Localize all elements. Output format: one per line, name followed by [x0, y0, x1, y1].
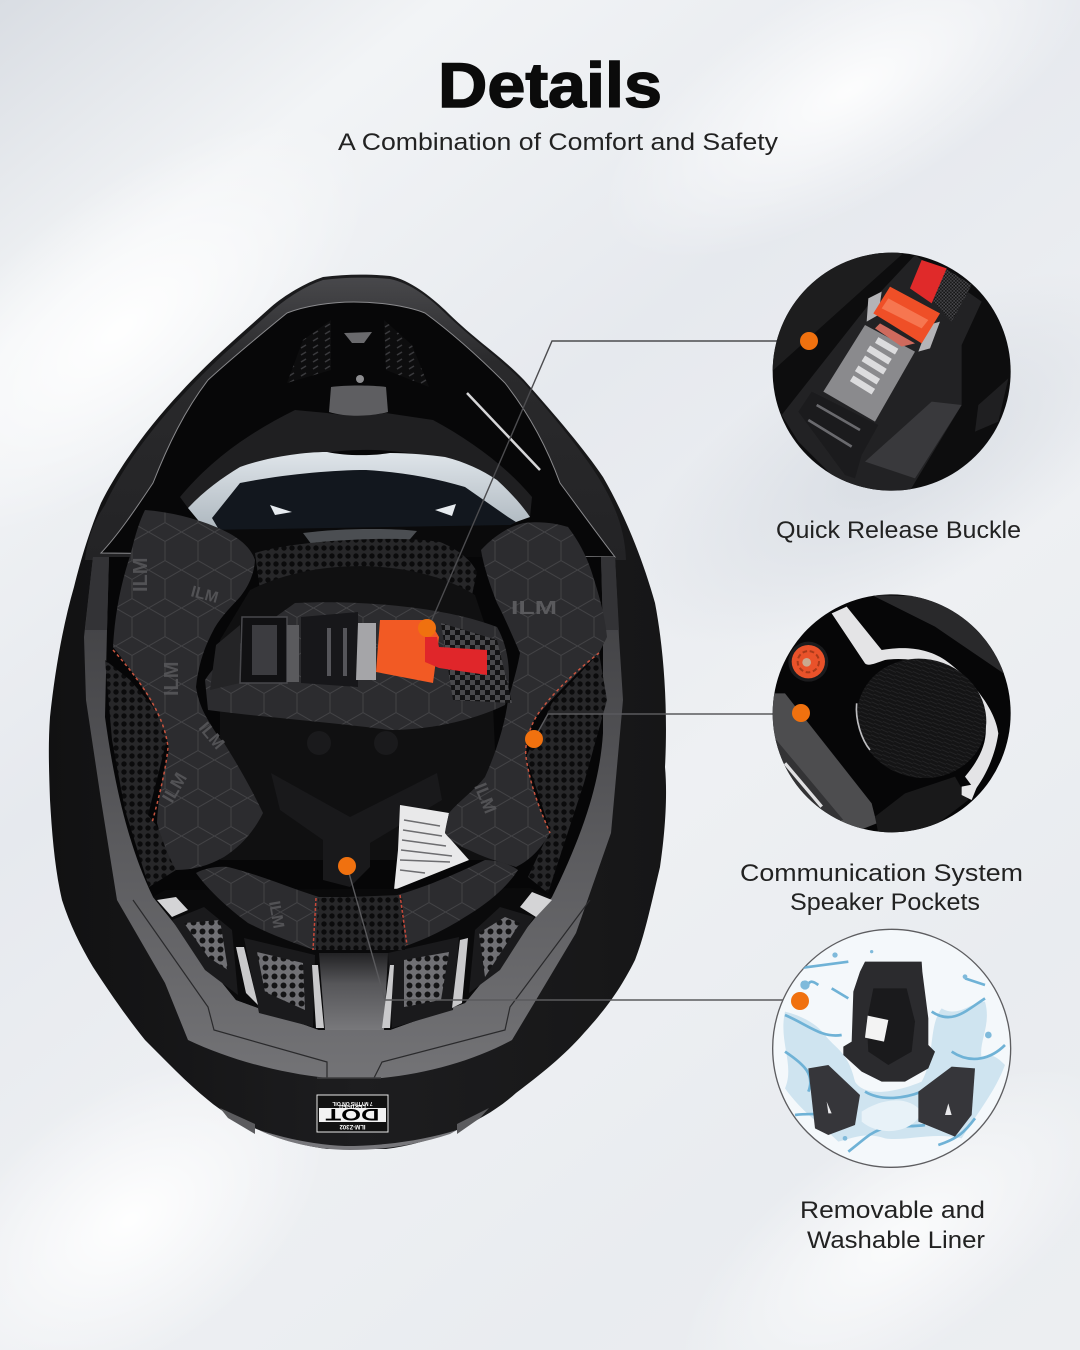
rim seams	[133, 900, 590, 1078]
slider	[240, 617, 287, 683]
callout line 1	[431, 341, 801, 622]
detail circle: quick release buckle	[772, 252, 1011, 493]
side vents	[220, 1108, 489, 1134]
visor slit	[303, 529, 417, 545]
callout line 3	[347, 866, 800, 1000]
marker 1	[418, 619, 436, 637]
vent tray	[153, 888, 552, 1030]
white corners	[157, 892, 552, 917]
subtitle: A Combination of Comfort and Safety	[338, 129, 778, 156]
text: Speaker Pockets	[790, 889, 980, 916]
right cheek pad: ILM	[470, 780, 500, 816]
visor dark	[212, 470, 516, 540]
left cheek pad: ILM	[130, 558, 152, 592]
text: Washable Liner	[807, 1227, 985, 1254]
helmet	[49, 275, 666, 1150]
left pad	[808, 1065, 860, 1135]
detail circle: liner	[773, 929, 1011, 1167]
dot sticker: ILM-Z302	[339, 1123, 366, 1129]
metal plate	[356, 623, 376, 680]
right outer vent	[469, 907, 534, 993]
black bracket	[301, 612, 358, 687]
marker 4	[800, 332, 818, 350]
orange buckle	[376, 620, 439, 683]
upper liner	[200, 525, 540, 870]
carbon strap	[441, 623, 512, 703]
webbing	[210, 625, 240, 690]
arch highlight	[329, 386, 388, 416]
chin bar cavity	[101, 302, 615, 557]
seam	[317, 1077, 381, 1079]
crown details	[271, 773, 442, 887]
manual	[394, 805, 469, 890]
left inner vent	[244, 938, 315, 1027]
strap pad	[205, 602, 509, 730]
chin pad: ILM	[265, 900, 287, 930]
chin pad	[196, 860, 518, 950]
label: liner: Removable and	[800, 1197, 985, 1224]
dot sticker: DOT	[325, 1105, 380, 1124]
red tab	[425, 637, 487, 675]
interior	[105, 557, 603, 1030]
liner mesh arc	[255, 539, 477, 595]
rim side trims	[85, 557, 619, 630]
removable liner	[843, 962, 935, 1082]
dot sticker	[317, 1095, 388, 1132]
dot sticker: 7 MYTHS ON OIL	[332, 1100, 373, 1106]
webbing mid	[287, 625, 299, 682]
screw	[788, 642, 828, 682]
right cheek pad	[445, 522, 607, 867]
title: Details	[438, 51, 662, 121]
white vent line	[467, 393, 540, 470]
left cheek pad	[113, 510, 263, 870]
left cheek pad: ILM	[161, 662, 183, 696]
left cheek pad: ILM	[195, 718, 228, 753]
right pad	[918, 1067, 975, 1137]
center vent	[319, 953, 388, 1030]
top frame band	[85, 278, 626, 560]
right cheek pad: ILM	[511, 598, 557, 618]
right side mesh	[526, 653, 607, 893]
label: quick release: Quick Release Buckle	[776, 517, 1021, 544]
left cheek pad: ILM	[158, 769, 191, 806]
right inner vent	[388, 937, 459, 1028]
label sticker	[865, 1016, 888, 1042]
screw	[356, 375, 364, 383]
left outer vent	[172, 907, 238, 995]
visor light	[188, 452, 530, 537]
marker 2	[525, 730, 543, 748]
left side mesh	[105, 660, 176, 887]
detail circle: speaker pocket	[772, 594, 1011, 833]
visor vents	[270, 504, 456, 516]
marker 6	[791, 992, 809, 1010]
inner arch	[180, 410, 532, 517]
vent mesh left	[287, 320, 331, 383]
rim	[84, 557, 623, 1078]
marker 5	[792, 704, 810, 722]
helmet outer shell	[49, 275, 666, 1149]
dot sticker: CERTIFIED	[339, 1103, 366, 1109]
white slats	[236, 938, 468, 1028]
crown	[220, 566, 500, 860]
marker 3	[338, 857, 356, 875]
callout line 2	[534, 714, 800, 739]
vent mesh right	[384, 320, 429, 387]
left cheek pad: ILM	[189, 583, 220, 607]
label: speaker pockets: Communication System	[740, 860, 1023, 887]
bottom grey strip	[259, 1130, 457, 1150]
vent slider	[344, 332, 372, 343]
